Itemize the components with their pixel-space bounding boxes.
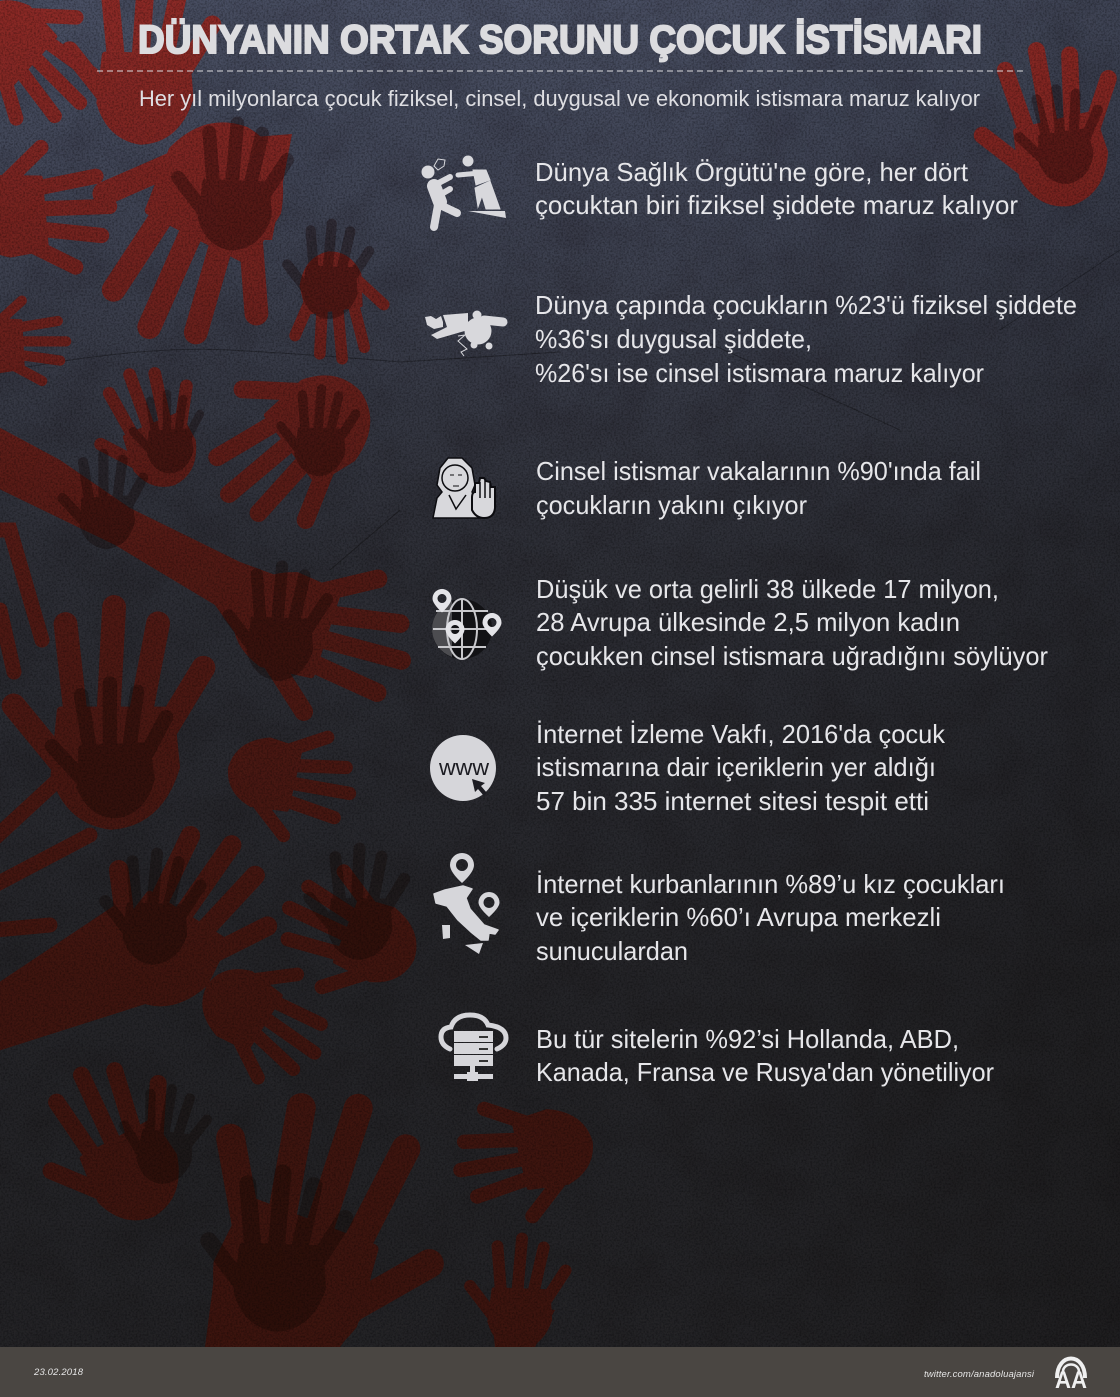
twitter handle: twitter.com/anadoluajansi [924,1369,1035,1380]
text: Bu tür sitelerin %92’si Hollanda, ABD, [536,1024,959,1054]
text: ve içeriklerin %60’ı Avrupa merkezli [536,902,941,932]
text: %26'sı ise cinsel istismara maruz kalıyor [535,358,984,388]
text: çocukken cinsel istismara uğradığını söylüyor [536,641,1048,671]
logo: Anadolu Agency: AA [1055,1367,1087,1394]
text: Düşük ve orta gelirli 38 ülkede 17 milyon, [536,574,999,604]
icon: woman raising hand [433,458,495,518]
text: 28 Avrupa ülkesinde 2,5 milyon kadın [536,607,960,637]
wrist bottom small [490,1300,555,1347]
item 6: victims and servers [434,853,1005,966]
item 3: perpetrators [433,456,981,520]
item 1: physical violence [422,156,1018,227]
item 2: global percentages [425,290,1077,388]
subtitle: Her yıl milyonlarca çocuk fiziksel, cinsel, duygusal ve ekonomik istismara maruz kalıyor [139,86,980,111]
text: 57 bin 335 internet sitesi tespit etti [536,786,929,816]
text [536,574,1048,671]
header [97,17,1025,111]
text [535,157,1018,220]
text [535,290,1077,388]
item 7: hosting countries [441,1015,994,1087]
wrist bottom [205,1250,375,1347]
text: Dünya Sağlık Örgütü'ne göre, her dört [535,157,969,187]
wrist top [190,134,292,240]
text [536,456,981,520]
left fragment fingers [0,530,90,930]
text: Dünya çapında çocukların %23'ü fiziksel şiddete [535,290,1077,320]
icon: two figures fighting [422,156,506,227]
icon: www circle with cursor [430,735,496,801]
text: istismarına dair içeriklerin yer aldığı [536,752,936,782]
icon: Italy map with pins [434,853,500,954]
text [536,1024,994,1087]
text [536,719,946,816]
text: çocukların yakını çıkıyor [536,490,807,520]
icon: cloud server [441,1015,506,1081]
text: %36'sı duygusal şiddete, [535,324,812,354]
icon: globe with pins [432,589,502,659]
text: İnternet İzleme Vakfı, 2016'da çocuk [536,719,946,749]
item 4: survey by country [432,574,1048,671]
text: İnternet kurbanlarının %89’u kız çocukları [536,869,1005,899]
item 5: websites [430,719,946,816]
text: sunuculardan [536,936,688,966]
title: DÜNYANIN ORTAK SORUNU ÇOCUK İSTİSMARI [138,17,982,62]
icon: www circle with cursor: www [438,755,489,780]
date: 23.02.2018 [33,1367,84,1378]
arm lower left [0,905,205,1052]
footer bar [0,1347,1120,1397]
icon: lying victim [425,310,503,356]
text [536,869,1005,966]
text: Cinsel istismar vakalarının %90'ında fail [536,456,981,486]
arm band [0,425,330,640]
text: çocuktan biri fiziksel şiddete maruz kalıyor [535,190,1018,220]
text: Kanada, Fransa ve Rusya'dan yönetiliyor [536,1057,994,1087]
